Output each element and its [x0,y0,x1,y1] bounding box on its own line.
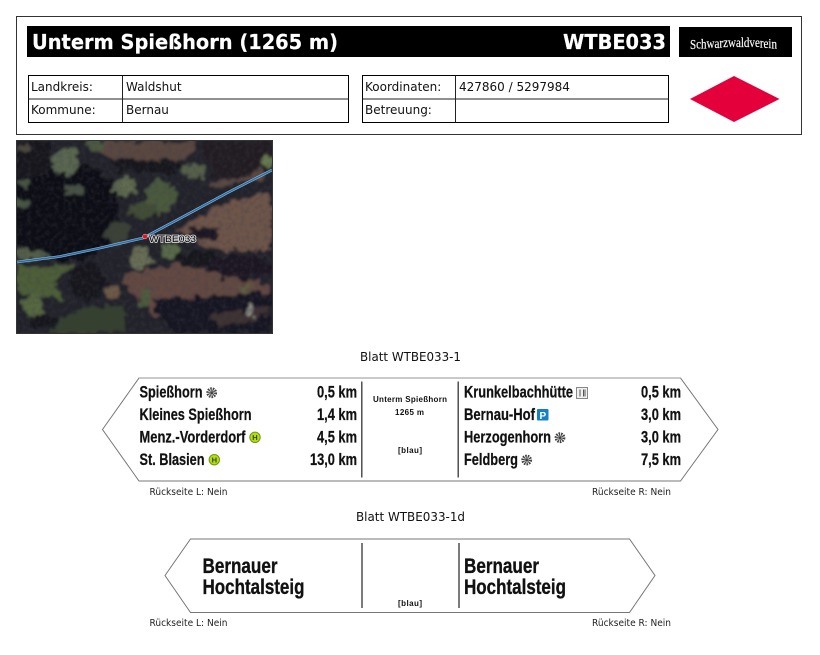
right destinations: Krunkelbachhütte [464,384,573,402]
right destinations: Feldberg [464,451,518,469]
right destinations [464,384,681,469]
icon: restaurant [576,388,588,398]
logo: Schwarzwaldverein: Schwarzwaldverein [690,35,777,52]
left destinations: 0,5 km [317,384,357,402]
icon: bus stop [250,432,260,442]
right destinations: Herzogenhorn [464,428,551,446]
title bar: Unterm Spießhorn (1265 m) [32,30,338,54]
center location text: [blau] [398,446,422,455]
icon: parking: P [539,411,546,422]
table: Landkreis and Kommune: Waldshut [126,80,182,94]
trail line [17,170,272,262]
header panel [16,16,802,134]
caption: Blatt WTBE033-1d: Blatt WTBE033-1d [356,510,465,524]
map marker and label: WTBE033 [149,234,196,245]
signpost sheet 1 [102,378,718,481]
right route name [464,555,566,599]
right destinations: 3,0 km [641,406,681,424]
center location text [373,395,447,455]
left route name: Hochtalsteig [202,576,304,599]
table: Koordinaten and Betreuung: Koordinaten: [365,80,441,94]
note: Rückseite L: Rückseite L: Nein [150,618,228,629]
logo: Schwarzwaldverein [679,27,792,57]
right destinations: Bernau-Hof [464,406,535,424]
left destinations: St. Blasien [140,451,204,469]
icon: summit [208,389,215,396]
left route name: Bernauer [202,555,278,578]
right route name: Bernauer [464,555,539,578]
table: Koordinaten and Betreuung: Betreuung: [365,103,432,117]
note: Rückseite R: Rückseite R: Nein [592,487,671,498]
table: Landkreis and Kommune: Kommune: [31,103,96,117]
map marker and label: WTBE033 [149,234,196,245]
note: Rückseite R: Rückseite R: Nein [592,618,671,629]
signpost sheet 1d [165,539,655,612]
center location text: 1265 m [395,408,424,417]
left destinations [140,384,357,469]
icon: bus stop: H [252,433,258,442]
center colour note: [blau] [398,599,422,608]
left destinations: Kleines Spießhorn [140,406,252,424]
center location text: Unterm Spießhorn [373,395,447,404]
left destinations: 13,0 km [310,451,357,469]
aerial map photo [16,140,273,334]
title bar [27,26,670,57]
table: Landkreis and Kommune: Landkreis: [31,80,93,94]
table: Landkreis and Kommune: Bernau [126,103,169,117]
left destinations: 4,5 km [317,428,357,446]
right destinations: 3,0 km [641,428,681,446]
title bar: WTBE033 [563,30,666,54]
left destinations: Menz.-Vorderdorf [140,428,246,446]
right route name: Hochtalsteig [464,576,566,599]
table: Landkreis and Kommune [28,76,348,122]
icon: bus stop: H [212,455,217,464]
icon: summit [523,457,530,463]
left destinations: Spießhorn [140,384,202,402]
caption: Blatt WTBE033-1: Blatt WTBE033-1 [360,350,461,364]
left destinations: 1,4 km [317,406,357,424]
left route name [202,555,304,599]
note: Rückseite L: Rückseite L: Nein [150,487,228,498]
icon: parking [537,409,548,422]
right destinations: 0,5 km [641,384,681,402]
icon: summit [557,434,563,441]
right destinations: 7,5 km [641,451,681,469]
table: Koordinaten and Betreuung [362,76,668,122]
icon: bus stop [209,454,220,465]
table: Koordinaten and Betreuung: 427860 / 5297984 [459,80,570,94]
icon: red diamond [690,76,780,122]
